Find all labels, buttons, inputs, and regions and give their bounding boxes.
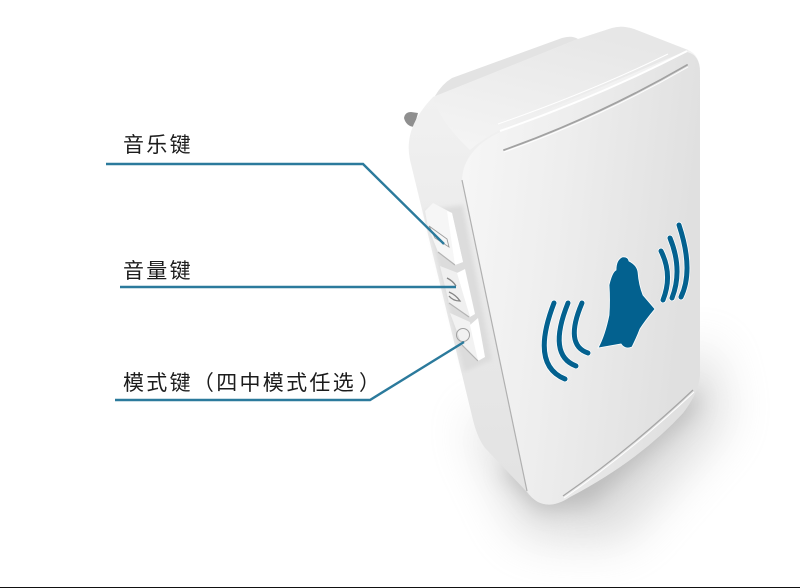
top slit bbox=[504, 65, 687, 150]
label: mode key: 模式键（四中模式任选） bbox=[123, 372, 382, 395]
body shell bbox=[409, 27, 700, 505]
mode button bbox=[450, 313, 485, 361]
top bevel bbox=[433, 27, 688, 150]
label: volume key: 音量键 bbox=[123, 260, 193, 283]
volume button bbox=[440, 266, 475, 317]
label: music key: 音乐键 bbox=[123, 134, 193, 157]
callout line: volume key bbox=[120, 286, 456, 288]
icon: plug pin bbox=[404, 112, 418, 127]
callout line: music key bbox=[106, 164, 444, 244]
face seam bbox=[462, 180, 527, 491]
drop shadow bbox=[470, 345, 725, 540]
button recess shading bbox=[425, 205, 492, 372]
callout line: mode key bbox=[115, 342, 464, 400]
device body bbox=[409, 27, 700, 505]
front face bbox=[462, 52, 700, 505]
bottom slit bbox=[563, 390, 693, 496]
music button bbox=[425, 203, 463, 265]
bottom rule bbox=[0, 587, 800, 588]
top seam highlight bbox=[500, 51, 687, 131]
icon: bell with sound waves bbox=[544, 225, 687, 379]
plug base bbox=[435, 37, 578, 100]
